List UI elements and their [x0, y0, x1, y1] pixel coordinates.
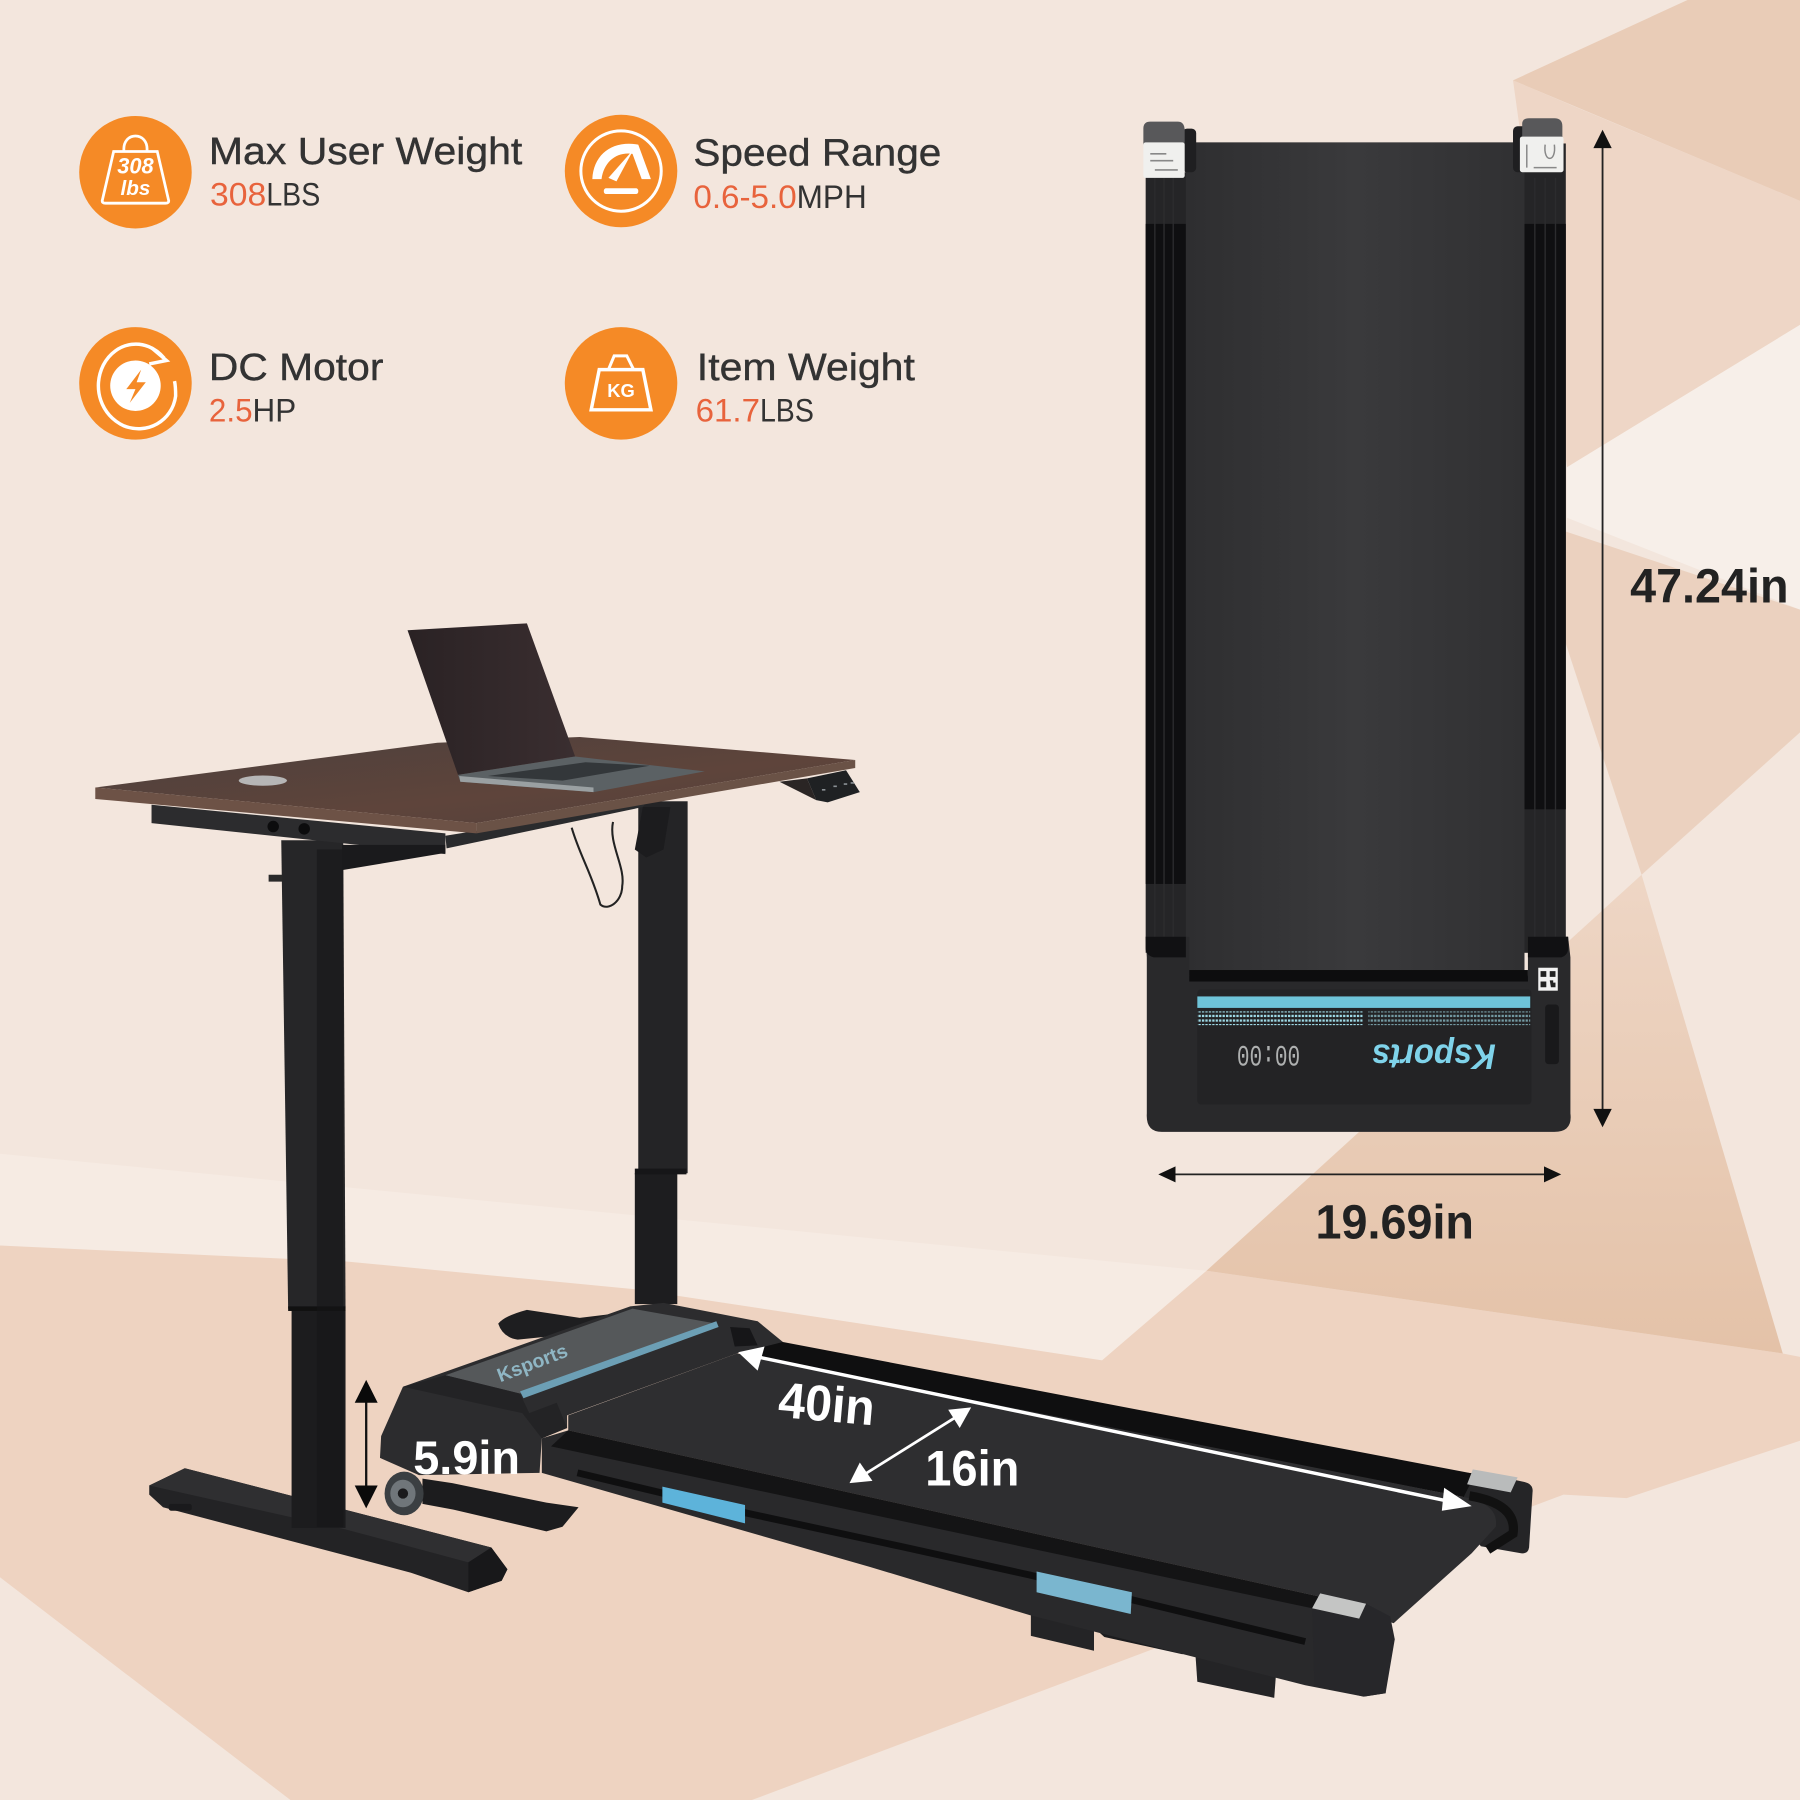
near top rail	[551, 1430, 1320, 1608]
standing desk	[95, 737, 860, 1592]
far right end block	[1458, 1473, 1533, 1553]
value: 61.7LBS	[696, 392, 814, 428]
belt length arrow 40in	[738, 1347, 1472, 1511]
laptop	[408, 623, 705, 792]
value: 0.6-5.0MPH	[693, 179, 867, 215]
cable	[572, 822, 623, 907]
QR label	[1538, 968, 1558, 991]
label: DC Motor	[209, 347, 383, 389]
far rail	[737, 1335, 1475, 1497]
right leg	[635, 801, 688, 1304]
dimension: 5.9in: 5.9in	[413, 1431, 520, 1484]
motor bracket	[635, 807, 670, 858]
logo: Ksports	[1372, 1037, 1496, 1077]
blue pad 2	[1037, 1572, 1132, 1614]
dimension: 40in: 40in	[776, 1371, 877, 1436]
motor hood	[380, 1303, 783, 1475]
blue pad 1	[662, 1487, 745, 1523]
belt width arrow 16in	[849, 1407, 971, 1483]
left end cap	[1143, 122, 1196, 178]
left rail	[1146, 172, 1187, 953]
desk frame beam	[152, 804, 645, 870]
blue stripes	[1197, 996, 1530, 1025]
base console	[1146, 937, 1571, 1132]
left leg	[281, 840, 346, 1528]
icon: 308 lbs weight	[79, 116, 192, 228]
control pad	[779, 770, 860, 802]
spec: DC motor	[79, 327, 383, 440]
grommet	[239, 775, 287, 786]
value: 2.5HP	[209, 392, 296, 428]
spec: speed range	[565, 115, 941, 227]
front wheel	[385, 1472, 424, 1515]
icon: KG weight	[565, 327, 677, 440]
far label	[1467, 1469, 1518, 1492]
spec: item weight	[565, 327, 915, 440]
icon: 308 lbs weight: lbs	[121, 177, 150, 200]
display panel	[1197, 990, 1531, 1104]
hood logo: Ksports	[494, 1340, 571, 1387]
value: 308LBS	[210, 176, 320, 212]
far right roller arc	[1469, 1496, 1513, 1550]
spec: max user weight	[79, 116, 523, 228]
side slot	[577, 1473, 1305, 1642]
near corner block	[1312, 1593, 1395, 1697]
dimension: 19.69in: 19.69in	[1316, 1196, 1474, 1250]
desktop	[95, 737, 855, 833]
height arrow 5.9in	[355, 1380, 378, 1508]
near side body	[542, 1430, 1390, 1697]
digital time: 00:00	[1237, 1037, 1300, 1071]
top view treadmill	[1143, 118, 1571, 1132]
label: Speed Range	[693, 132, 941, 174]
label: Max User Weight	[209, 131, 523, 173]
icon: 308 lbs weight: 308	[117, 153, 155, 178]
screen	[408, 623, 575, 775]
rear handle	[498, 1310, 608, 1340]
height knob	[269, 875, 282, 882]
width arrow 19.69in	[1158, 1166, 1561, 1182]
right end cap	[1513, 118, 1564, 172]
belt	[1186, 142, 1524, 976]
label: Item Weight	[697, 347, 915, 389]
height arrow 47.24in	[1593, 130, 1612, 1127]
side view treadmill	[380, 1303, 1533, 1698]
icon: speedometer	[565, 115, 677, 227]
dimension: 16in: 16in	[925, 1439, 1019, 1496]
under body and roller	[422, 1479, 579, 1531]
foot	[149, 1468, 507, 1592]
feet	[1031, 1607, 1277, 1698]
belt surface	[568, 1353, 1496, 1623]
keyboard	[488, 762, 650, 781]
icon: KG weight: KG	[607, 380, 635, 401]
deck	[458, 757, 705, 792]
right rail	[1523, 143, 1566, 953]
dimension: 47.24in: 47.24in	[1630, 560, 1789, 614]
icon: motor bolt	[79, 327, 192, 440]
